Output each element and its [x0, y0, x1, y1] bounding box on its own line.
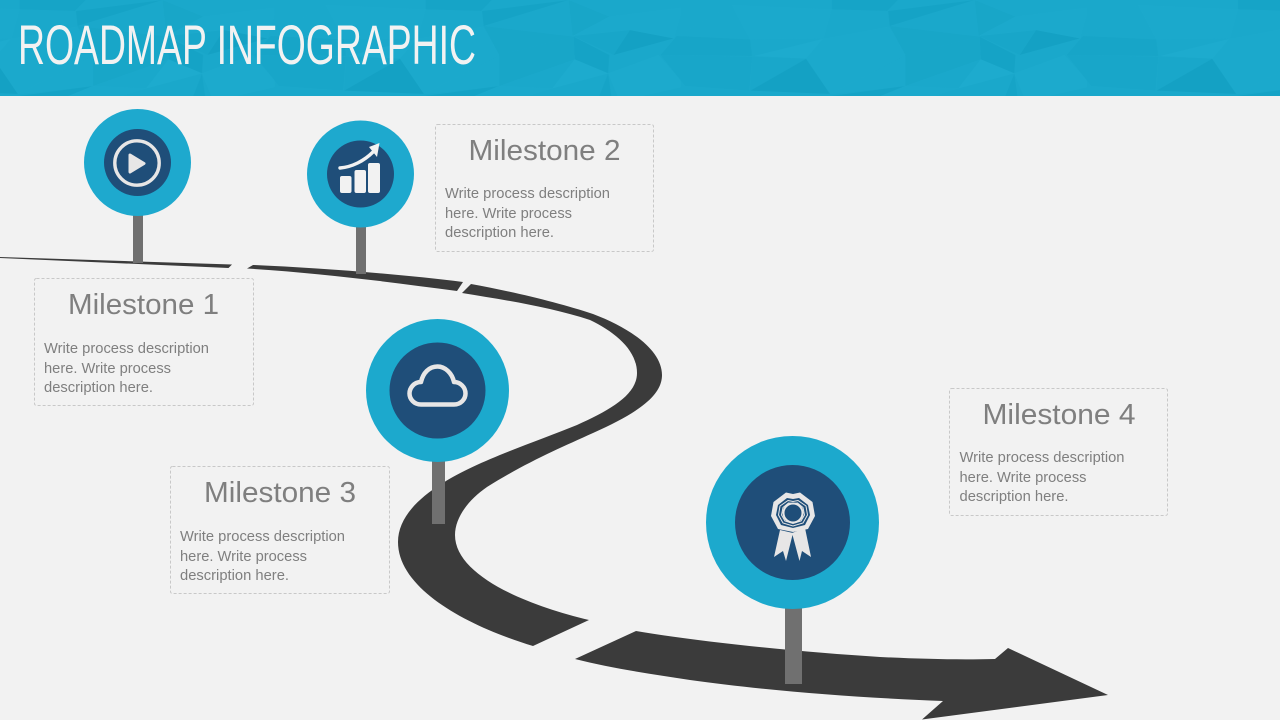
pin 3: cloud icon	[366, 319, 509, 524]
pin 2: growth chart icon	[307, 120, 414, 274]
text: milestone 4 description: Write process description	[960, 450, 1124, 466]
text: milestone 2 description: here. Write process	[445, 206, 572, 222]
text: milestone 1 description	[44, 341, 209, 396]
icon: award rosette	[771, 492, 815, 561]
icon: bar chart with rising arrow	[340, 143, 380, 193]
pin 4: award ribbon icon	[706, 436, 879, 684]
text: milestone 3 description: description here.	[180, 568, 289, 584]
panel: milestone 4	[950, 388, 1168, 516]
title: ROADMAP INFOGRAPHIC	[18, 14, 476, 76]
heading: milestone 3: Milestone 3	[204, 477, 356, 509]
text: milestone 4 description: description here.	[960, 489, 1068, 505]
text: milestone 4 description: here. Write process	[960, 470, 1086, 486]
pin 1: play icon	[84, 109, 191, 263]
text: milestone 3 description: Write process description	[180, 529, 345, 545]
text: milestone 1 description: description here.	[44, 380, 153, 396]
text: milestone 3 description: here. Write process	[180, 549, 307, 565]
icon: play button	[115, 141, 159, 185]
heading: milestone 2: Milestone 2	[468, 135, 620, 167]
panel: milestone 3	[170, 466, 390, 594]
text: milestone 1 description: here. Write process	[44, 361, 171, 377]
panel: milestone 1	[34, 278, 254, 406]
header banner	[0, 0, 1280, 96]
icon: cloud	[410, 366, 466, 404]
text: milestone 2 description: description here.	[445, 225, 554, 241]
heading: milestone 1: Milestone 1	[68, 289, 219, 321]
panel: milestone 2	[436, 124, 654, 252]
text: milestone 4 description	[960, 450, 1124, 505]
text: milestone 2 description: Write process description	[445, 186, 610, 202]
text: milestone 3 description	[180, 529, 345, 584]
text: milestone 1 description: Write process description	[44, 341, 209, 357]
text: milestone 2 description	[445, 186, 610, 241]
heading: milestone 4: Milestone 4	[982, 399, 1136, 431]
road: winding arrow path	[0, 257, 1108, 720]
